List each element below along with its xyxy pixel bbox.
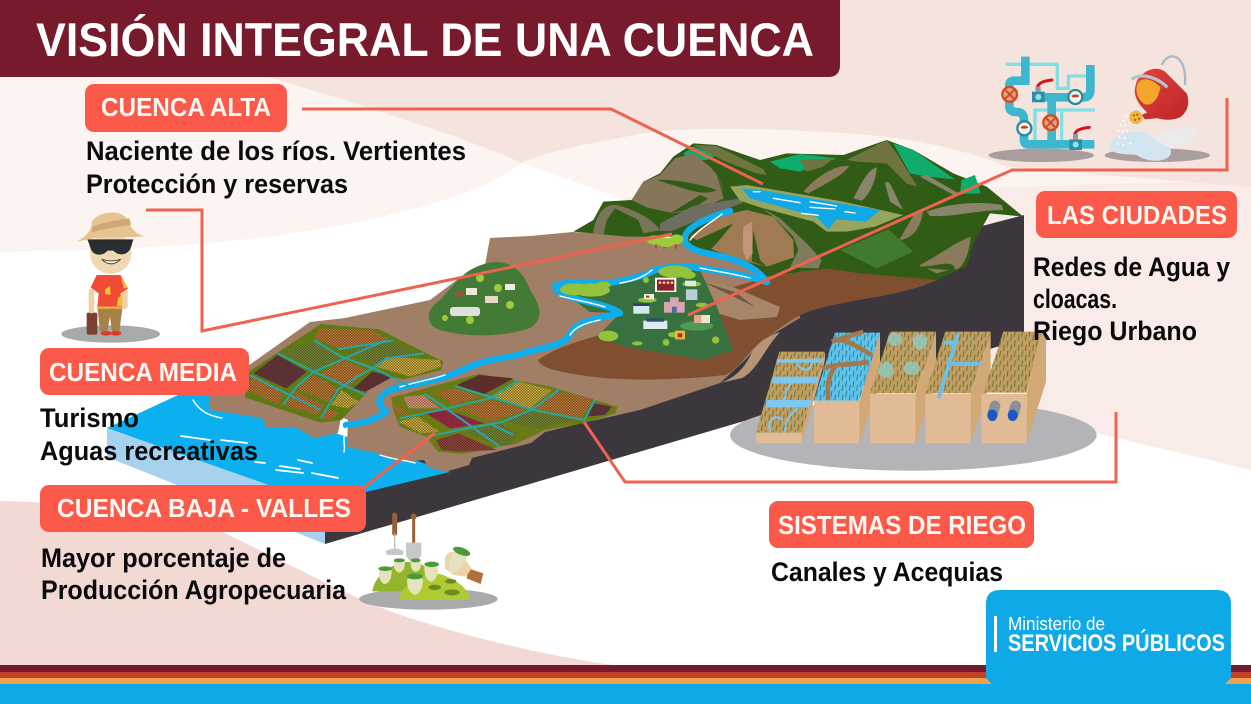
gray ridge <box>760 207 822 268</box>
label: cuenca baja <box>40 485 366 532</box>
dark furrow in tan patch <box>703 282 755 307</box>
text: cuenca media description: Aguas recreativas <box>40 436 258 466</box>
label: cuenca alta <box>85 84 287 132</box>
pressure gauges <box>1017 90 1082 135</box>
central brown hill <box>690 210 794 267</box>
icon: strawberry plants and tools <box>359 514 498 610</box>
lake shore <box>730 185 903 232</box>
label: cuenca alta: CUENCA ALTA <box>101 92 271 122</box>
title bar <box>0 0 840 77</box>
field left canals <box>250 340 424 418</box>
text: cuenca media description <box>40 403 258 466</box>
tan patch east of city <box>700 280 780 320</box>
connector lines <box>146 98 1227 492</box>
block 1: flood irrigation <box>756 352 825 443</box>
icon: pipe network <box>989 57 1095 162</box>
label: cuenca baja: CUENCA BAJA - VALLES <box>57 493 351 523</box>
smile <box>102 259 121 264</box>
gray streaks <box>853 167 1003 216</box>
field left plots <box>248 328 441 420</box>
gray base ellipse <box>730 399 1097 471</box>
pink rock streak <box>743 222 753 261</box>
logo text: Ministerio de <box>1008 614 1105 634</box>
connector: las ciudades <box>688 98 1227 315</box>
lake water <box>742 188 880 229</box>
background: pink top wave <box>269 0 1251 187</box>
hill green folds <box>693 223 767 267</box>
background: pale left and right band <box>0 60 1251 470</box>
block 2: basin irrigation <box>814 332 880 443</box>
icon: watering can <box>1105 56 1210 162</box>
text: las ciudades description <box>1033 252 1230 346</box>
field right canals <box>400 380 595 447</box>
field left outline <box>245 324 443 423</box>
olive slopes <box>693 140 917 187</box>
hair <box>87 239 133 250</box>
left village houses <box>442 274 515 324</box>
rocky left hill <box>632 153 724 213</box>
mountain range <box>573 140 1023 280</box>
city buildings <box>633 278 713 339</box>
city hill bushes <box>598 266 719 346</box>
watershed terrain block <box>107 140 1024 544</box>
legs <box>97 306 123 332</box>
left village green <box>429 262 539 335</box>
lake highlights <box>753 192 855 215</box>
label: las ciudades <box>1036 191 1237 238</box>
irrigated field left <box>245 324 443 423</box>
garden tools <box>385 514 421 562</box>
middle city green <box>560 267 733 360</box>
green meadow <box>840 229 913 268</box>
label: cuenca media: CUENCA MEDIA <box>49 357 237 387</box>
text: las ciudades description: Redes de Agua y <box>1033 252 1230 282</box>
hill shadows <box>657 163 727 213</box>
text: las ciudades description: Riego Urbano <box>1033 316 1197 346</box>
text: cuenca baja description <box>41 543 347 605</box>
icon: tourist character <box>61 212 160 343</box>
text: cuenca alta description: Protección y reservas <box>86 169 348 199</box>
mounds <box>372 562 425 591</box>
field right outline <box>391 374 617 454</box>
ministry logo box <box>986 590 1231 684</box>
label: sistemas de riego: SISTEMAS DE RIEGO <box>778 510 1026 540</box>
sea highlights <box>181 436 338 478</box>
shoes <box>101 331 121 336</box>
text: sistemas de riego description: Canales y Acequias <box>771 557 1003 587</box>
irrigation systems diagram <box>730 332 1097 471</box>
block 3: sprinkler irrigation <box>870 332 936 443</box>
connector: cuenca baja <box>358 433 435 492</box>
trees near river <box>560 234 719 346</box>
text: cuenca alta description <box>86 136 466 199</box>
text: cuenca alta description: Naciente de los ríos. Vertientes <box>86 136 466 166</box>
connector: cuenca alta <box>302 109 763 184</box>
head <box>90 233 131 274</box>
mountain silhouette <box>573 140 1023 280</box>
water front side <box>107 428 325 544</box>
tan land <box>209 230 800 472</box>
text: cuenca baja description: Mayor porcentaje de <box>41 543 286 573</box>
irrigated field right <box>391 374 617 454</box>
shirt <box>91 275 128 307</box>
connector: cuenca media <box>146 210 672 331</box>
strawberries <box>379 562 438 595</box>
text: las ciudades description: cloacas. <box>1033 284 1117 314</box>
text: cuenca baja description: Producción Agropecuaria <box>41 575 347 605</box>
teal forest patches <box>683 143 981 194</box>
title text: VISIÓN INTEGRAL DE UNA CUENCA <box>36 13 814 66</box>
label: sistemas de riego <box>769 501 1034 548</box>
background: pale right band <box>620 180 1251 470</box>
hat <box>77 212 144 242</box>
red valves <box>1002 87 1058 130</box>
dark soil side <box>325 215 1024 544</box>
lower land margin <box>720 332 780 383</box>
gray valley track <box>660 198 743 231</box>
hand holding a strawberry <box>445 545 483 584</box>
connector: sistemas de riego <box>584 412 1116 482</box>
block 5: drip irrigation with pipes <box>981 332 1046 443</box>
footer color stripes <box>0 665 1251 704</box>
sunglasses <box>89 245 132 255</box>
outlet pipes <box>987 406 1018 421</box>
riverside grove <box>647 234 683 249</box>
ridge streaks <box>803 166 971 273</box>
background: pink lower-left wave <box>0 501 620 666</box>
field right plots <box>394 375 612 452</box>
arms <box>89 288 128 313</box>
sea water <box>107 392 450 505</box>
label: las ciudades: LAS CIUDADES <box>1047 200 1227 230</box>
bush patch over river bend <box>560 282 611 297</box>
river highlights <box>193 214 750 463</box>
suitcase <box>87 313 97 335</box>
text: cuenca media description: Turismo <box>40 403 139 433</box>
dark brown land <box>538 268 937 380</box>
river <box>346 211 767 425</box>
block 4: channel irrigation <box>925 332 991 443</box>
label: cuenca media <box>40 348 249 395</box>
far-left ridge <box>593 205 660 235</box>
